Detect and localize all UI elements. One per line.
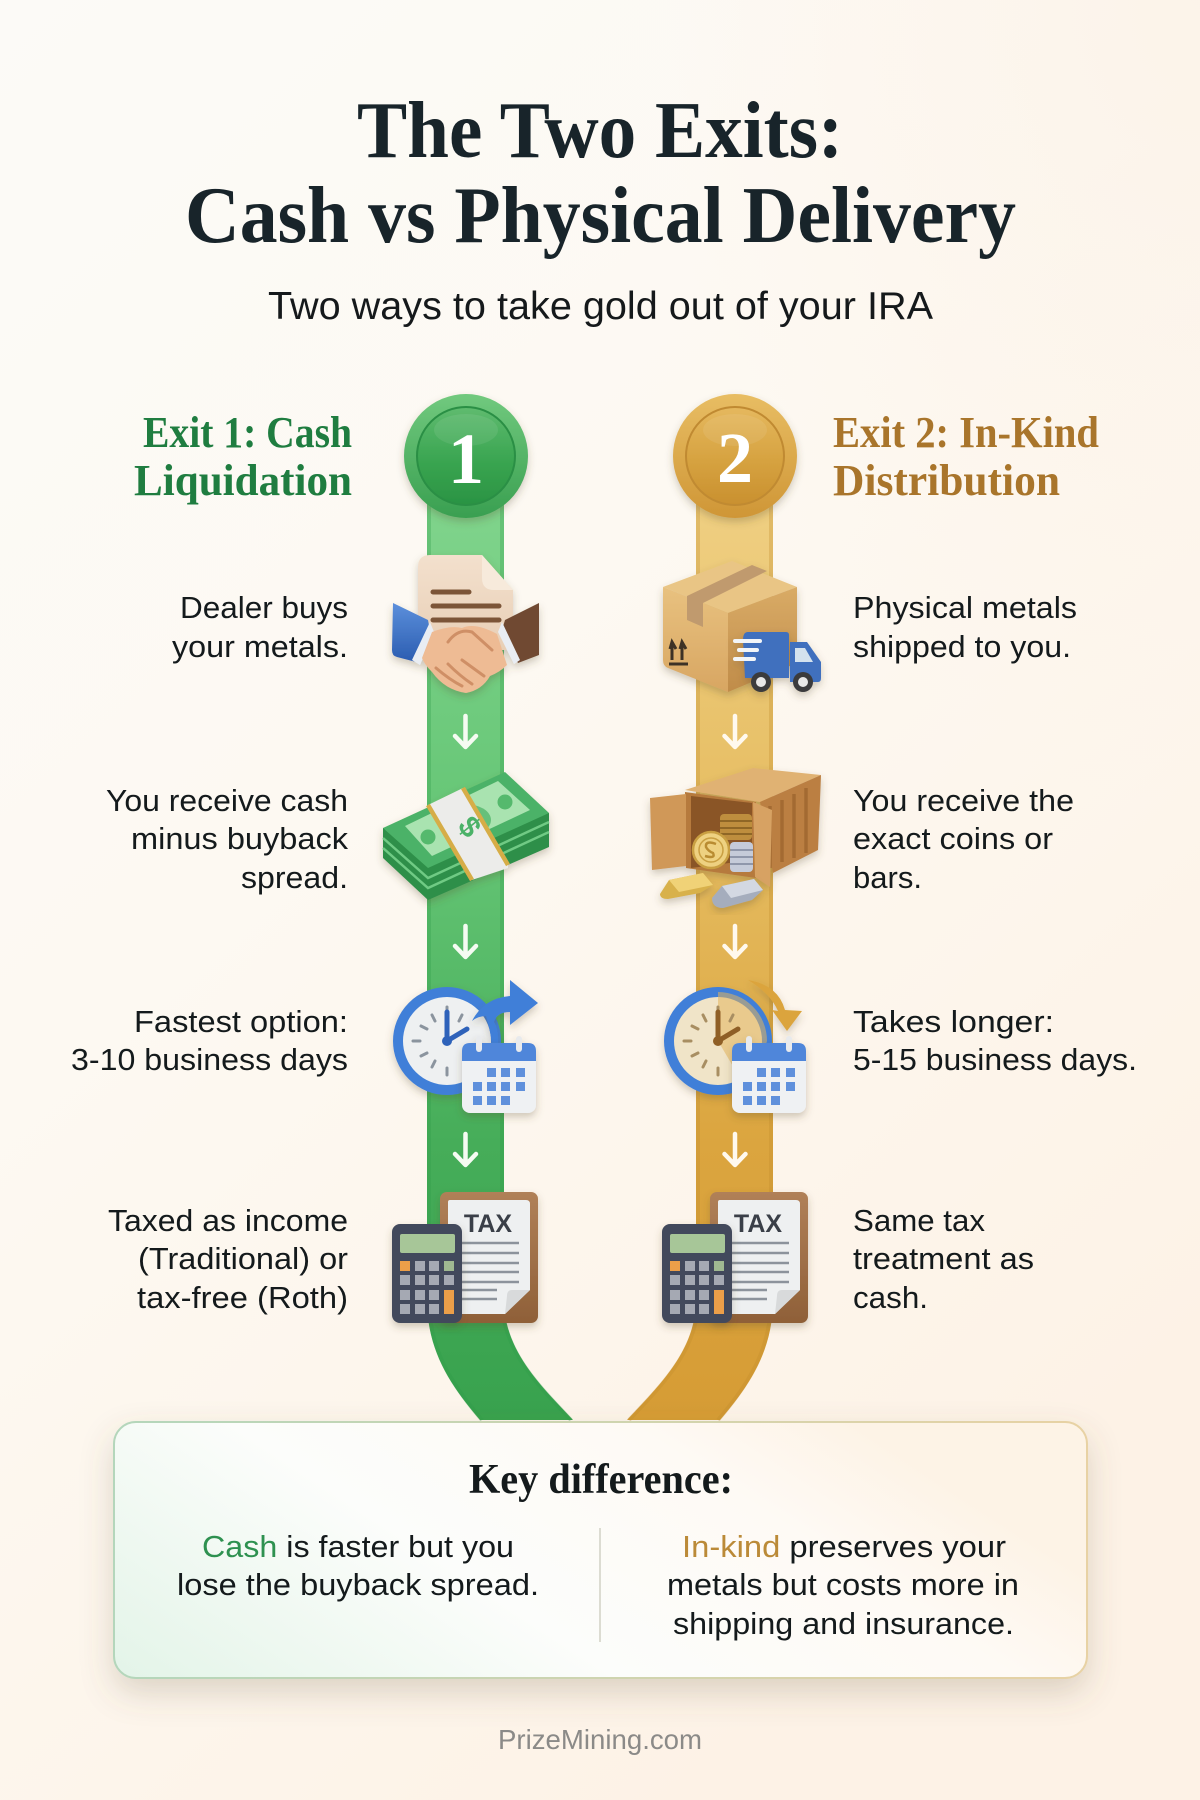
step text: fastest option: 3-10 business days xyxy=(71,1042,348,1077)
step text: takes longer xyxy=(853,1004,1137,1077)
heading: exit 1 xyxy=(134,408,352,505)
step text: physical metals: shipped to you. xyxy=(853,629,1071,664)
title: The Two Exits: xyxy=(357,87,843,175)
step text: dealer buys: your metals. xyxy=(172,629,348,664)
title xyxy=(185,87,1016,260)
icon: calculator and tax form (cash) xyxy=(392,1192,538,1323)
icon: calculator and tax form (in-kind) xyxy=(662,1192,808,1323)
badge: number 1: 1 xyxy=(448,419,484,499)
cash comparison xyxy=(177,1529,539,1602)
step text: fastest option: Fastest option: xyxy=(134,1004,348,1039)
arrow: green step 2 xyxy=(455,926,476,957)
title: Cash vs Physical Delivery xyxy=(185,172,1016,260)
step text: takes longer: 5-15 business days. xyxy=(853,1042,1137,1077)
step text: taxed as income: (Traditional) or xyxy=(138,1241,348,1276)
icon: shipping box and truck xyxy=(663,561,821,692)
step text: dealer buys xyxy=(172,590,348,664)
icon: cash stack: $ xyxy=(451,810,488,844)
arrow: green step 1 xyxy=(455,716,476,747)
badge: number 1 xyxy=(404,394,528,518)
step text: receive coins: exact coins or xyxy=(853,821,1053,856)
step text: dealer buys: Dealer buys xyxy=(180,590,348,625)
heading: exit 2 xyxy=(833,408,1099,505)
step text: taxed as income: Taxed as income xyxy=(108,1203,348,1238)
step text: same tax: cash. xyxy=(853,1280,928,1315)
arrow: gold step 2 xyxy=(724,926,746,957)
step text: receive cash: minus buyback xyxy=(131,821,349,856)
step text: fastest option xyxy=(71,1004,348,1077)
cash comparison: lose the buyback spread. xyxy=(177,1567,539,1602)
step text: receive cash xyxy=(106,783,349,895)
icon: calculator and tax form (cash): TAX xyxy=(464,1210,512,1238)
step text: same tax: Same tax xyxy=(853,1203,985,1238)
step text: same tax xyxy=(853,1203,1034,1315)
subtitle: Two ways to take gold out of your IRA xyxy=(268,285,933,328)
arrow: gold step 1 xyxy=(724,716,746,747)
icon: open container with coins and bars xyxy=(650,768,821,908)
arrow: green step 3 xyxy=(455,1134,476,1165)
heading: exit 1: Liquidation xyxy=(134,456,352,505)
path: exit 2 gold band xyxy=(627,500,773,1420)
step text: physical metals xyxy=(853,590,1077,664)
in-kind comparison xyxy=(667,1529,1019,1641)
footer: site name: PrizeMining.com xyxy=(498,1724,702,1755)
in-kind comparison: In-kind preserves your xyxy=(682,1529,1006,1564)
in-kind comparison: metals but costs more in xyxy=(667,1567,1019,1602)
step text: receive coins xyxy=(853,783,1074,895)
step text: taxed as income: tax-free (Roth) xyxy=(137,1280,348,1315)
icon: calculator and tax form (in-kind): TAX xyxy=(734,1210,782,1238)
heading: exit 2: Exit 2: In-Kind xyxy=(833,408,1099,457)
card heading: Key difference: xyxy=(469,1457,733,1503)
badge: number 2: 2 xyxy=(717,418,753,498)
heading: exit 1: Exit 1: Cash xyxy=(143,408,352,457)
panel: key difference xyxy=(114,1422,1087,1678)
badge: number 2 xyxy=(673,394,797,518)
step text: receive cash: You receive cash xyxy=(106,783,348,818)
step text: takes longer: Takes longer: xyxy=(853,1004,1054,1039)
heading: exit 2: Distribution xyxy=(833,456,1060,505)
divider xyxy=(599,1528,601,1642)
step text: taxed as income xyxy=(108,1203,348,1315)
step text: same tax: treatment as xyxy=(853,1241,1034,1276)
step text: receive coins: You receive the xyxy=(853,783,1074,818)
path: exit 1 green band xyxy=(427,500,573,1420)
card background xyxy=(114,1422,1087,1678)
step text: physical metals: Physical metals xyxy=(853,590,1077,625)
icon: handshake and contract xyxy=(392,555,539,693)
cash comparison: Cash is faster but you xyxy=(202,1529,514,1564)
icon: cash stack xyxy=(383,772,549,900)
icon: clock, arrow and calendar (fast) xyxy=(398,980,538,1113)
step text: receive cash: spread. xyxy=(241,860,348,895)
arrow: gold step 3 xyxy=(724,1134,746,1165)
in-kind comparison: shipping and insurance. xyxy=(673,1606,1014,1641)
step text: receive coins: bars. xyxy=(853,860,922,895)
icon: clock, arrow and calendar (slow) xyxy=(669,980,806,1113)
